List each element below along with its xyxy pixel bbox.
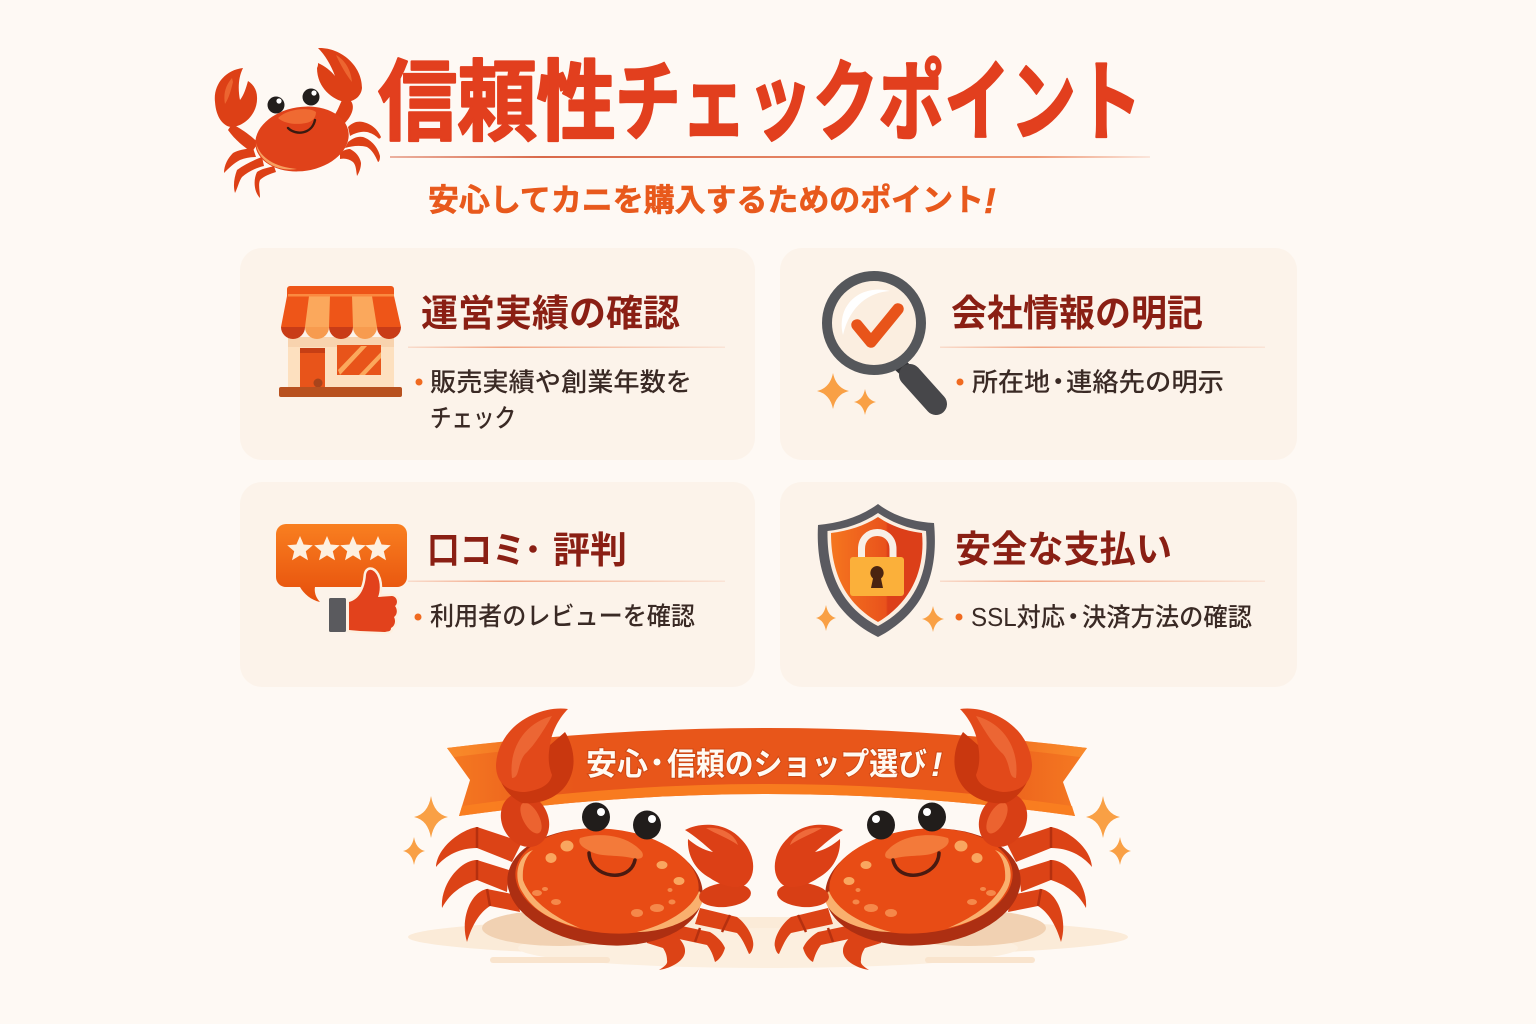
body text [971, 604, 1252, 632]
body text: SSL対応 [971, 604, 1065, 632]
card background [240, 482, 755, 687]
small arm [698, 881, 752, 909]
panel: secure payment [780, 482, 1297, 687]
smile [589, 853, 635, 875]
bullet [416, 378, 422, 386]
body rim [501, 819, 709, 955]
icon: rating bubble with thumb [276, 524, 407, 632]
heading [427, 530, 627, 571]
subtitle: 安心してカニを購入するためのポイント [428, 183, 984, 218]
card background [780, 248, 1297, 460]
title rule [390, 156, 1150, 158]
raised claw [496, 708, 574, 803]
bullet [956, 378, 964, 386]
crab eyes [268, 88, 320, 114]
body text: ・ [1060, 604, 1086, 632]
sparkles right [1086, 796, 1131, 865]
body text [972, 369, 1224, 397]
eyes [582, 802, 661, 840]
heading: 会社情報の明記 [951, 293, 1203, 334]
shell highlight [579, 835, 643, 859]
title [378, 53, 1142, 152]
title: チェックポイント [615, 53, 1142, 152]
body text: 販売実績や創業年数を [430, 369, 692, 397]
divider [408, 346, 725, 348]
bullet [956, 614, 962, 620]
card background [780, 482, 1297, 687]
crab body [251, 100, 353, 178]
panel: operating record [240, 248, 755, 460]
bullet [414, 614, 422, 620]
icon: shop [279, 286, 402, 397]
title: 信頼性 [378, 53, 616, 152]
icon: mascot crab [215, 48, 381, 198]
panel: reviews [240, 482, 755, 687]
panel: company info [780, 248, 1297, 460]
icon: magnifier [817, 276, 936, 415]
ground shadow [408, 910, 1128, 968]
body shell [510, 820, 704, 942]
banner text: 安心 [586, 747, 648, 782]
heading: 口コミ [427, 530, 525, 571]
body text: 所在地 [972, 369, 1050, 397]
banner text: ! [931, 746, 942, 784]
banner text: 信頼のショップ選び [667, 747, 927, 782]
sparkles left [403, 796, 448, 865]
body text: 決済方法の確認 [1082, 604, 1252, 632]
banner ribbon [447, 728, 1087, 816]
raised arm [492, 784, 558, 856]
heading: 安全な支払い [955, 529, 1172, 570]
body text: 連絡先の明示 [1066, 369, 1224, 397]
divider [940, 580, 1265, 582]
crab claws [215, 68, 257, 127]
subtitle: ! [984, 182, 996, 221]
shell crescents [517, 850, 702, 932]
divider [408, 580, 725, 582]
crab legs [224, 100, 381, 198]
divider [940, 346, 1265, 348]
left crab [436, 708, 753, 970]
body text line 2: チェック [430, 405, 516, 433]
right crab [775, 708, 1092, 970]
icon: shield with padlock [816, 504, 944, 637]
shell spots [532, 840, 684, 917]
heading: 運営実績の確認 [421, 293, 680, 334]
leg joints [477, 827, 730, 942]
body text: ・ [1046, 369, 1071, 397]
card background [240, 248, 755, 460]
body text: 利用者のレビューを確認 [430, 603, 695, 631]
heading: 評判 [553, 530, 627, 571]
small claw [685, 825, 753, 887]
legs [436, 827, 753, 970]
